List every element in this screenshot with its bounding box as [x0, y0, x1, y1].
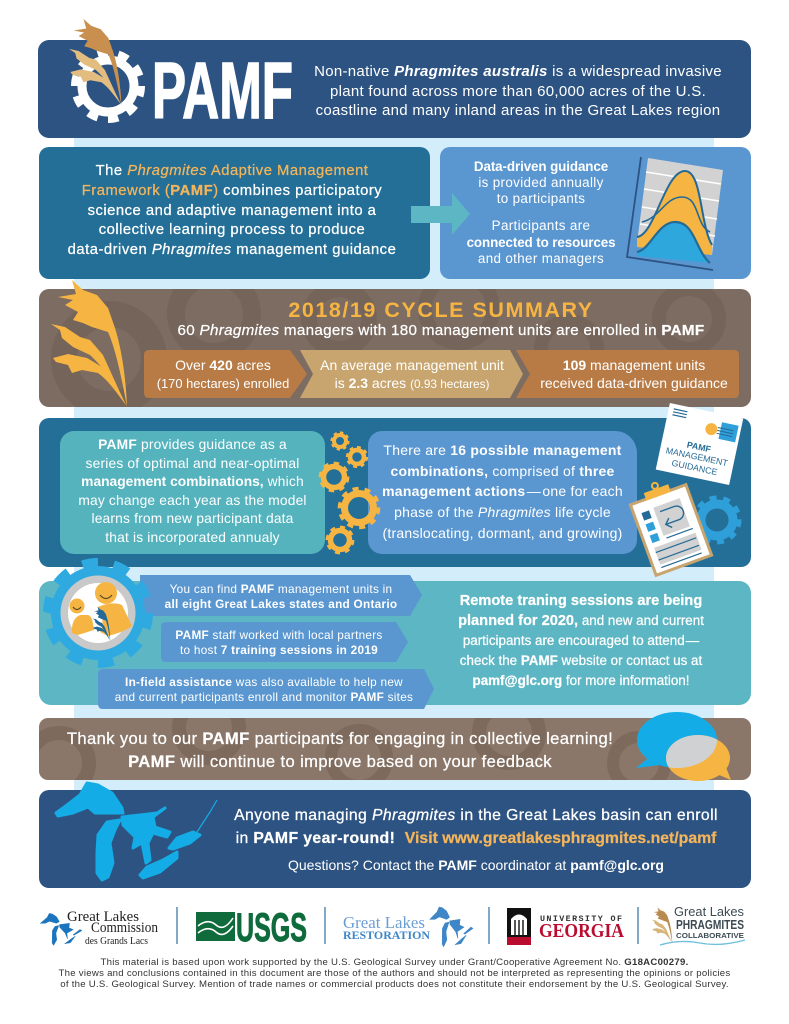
resources text: and other managers: [478, 251, 604, 266]
stat: acres enrolled: (170 hectares) enrolled: [157, 376, 289, 391]
logo: USGS: USGS: [236, 906, 307, 950]
fact arrows: [98, 575, 434, 709]
stat: units guided: [540, 357, 728, 391]
letter text: MANAGEMENT: [665, 446, 729, 469]
logo: Great Lakes Phragmites Collaborative: PHRAGMITES: [676, 917, 744, 932]
icon: PAMF logo: PAMF: [152, 46, 293, 135]
contact text: Questions? Contact the PAMF coordinator at pamf@glc.org: [288, 857, 664, 873]
16 combinations text: (translocating, dormant, and growing): [382, 525, 623, 541]
icon: blue gear: [697, 496, 742, 544]
fact: states: all eight Great Lakes states and Ontario: [165, 597, 397, 611]
header text: plant found across more than 60,000 acres of the U.S.: [330, 83, 706, 100]
letter text: PAMF: [686, 440, 712, 454]
icon: PAMF logo: [69, 19, 293, 135]
fact: in-field assistance: [115, 675, 413, 704]
arrow: [411, 193, 470, 235]
16 combinations text: There are 16 possible management: [383, 442, 622, 458]
funding disclaimer: This material is based upon work supported by the U.S. Geological Survey under Grant/Cooperative Agreement No. G18AC00279.: [100, 957, 689, 968]
stat: average unit: [320, 357, 504, 391]
panel: header: [38, 40, 751, 138]
stat: units guided: received data-driven guidance: [540, 375, 728, 391]
fact: training sessions: PAMF staff worked with local partners: [175, 628, 383, 642]
logo: Great Lakes Commission: Commission: [91, 920, 158, 936]
PAMF description text: science and adaptive management into a: [88, 203, 376, 219]
callout: guidance combinations: [60, 431, 325, 554]
logo: Great Lakes Restoration: Great Lakes: [343, 913, 425, 932]
heading: cycle summary: 2018/19 CYCLE SUMMARY: [288, 298, 594, 322]
thank you text: PAMF will continue to improve based on your feedback: [128, 752, 552, 771]
logo: Great Lakes Phragmites Collaborative: Great Lakes: [674, 904, 744, 919]
panel: what PAMF is: [39, 147, 430, 279]
logo: Great Lakes Commission: des Grands Lacs: [85, 936, 148, 947]
enroll text: [234, 807, 718, 847]
background stripe: [74, 130, 714, 805]
icon: clipboard: [629, 483, 713, 577]
stat: units guided: 109 management units: [563, 357, 705, 373]
funding disclaimer: of the U.S. Geological Survey. Mention of trade names or commercial products does not constitute their endorsement by the U.S. Geological Survey.: [60, 979, 729, 990]
guidance text: is provided annually: [478, 175, 604, 190]
background gears: [39, 718, 670, 780]
thank you text: [67, 729, 613, 771]
stat: average unit: is 2.3 acres (0.93 hectares): [335, 375, 489, 391]
PAMF description text: [68, 163, 396, 258]
panel: management combinations: [39, 418, 751, 567]
training callout text: Remote traning sessions are being: [460, 593, 702, 609]
guidance text: [474, 159, 608, 206]
PAMF description text: The Phragmites Adaptive Management: [96, 163, 368, 179]
combinations text: learns from new participant data: [91, 511, 294, 526]
guidance text: Data-driven guidance: [474, 159, 608, 174]
combinations text: management combinations, which: [81, 474, 304, 489]
PAMF description text: data-driven Phragmites management guidance: [68, 242, 396, 258]
header text: coastline and many inland areas in the Great Lakes region: [316, 102, 720, 119]
panel: cycle summary: [39, 289, 751, 407]
resources text: [467, 218, 615, 266]
logo: Great Lakes Restoration: [343, 907, 473, 947]
icon: guidance letter: [656, 403, 743, 485]
PAMF description text: Framework (PAMF) combines participatory: [82, 183, 382, 199]
training callout text: [458, 593, 704, 688]
background gears: [54, 290, 726, 404]
stat: acres enrolled: Over 420 acres: [175, 357, 271, 373]
logo: University of Georgia: UNIVERSITY OF: [540, 914, 622, 924]
letter text: [665, 440, 729, 477]
logo: Great Lakes Phragmites Collaborative: [652, 904, 745, 945]
logo: USGS: [196, 906, 307, 950]
enroll text: Anyone managing Phragmites in the Great Lakes basin can enroll: [234, 807, 718, 824]
16 combinations text: phase of the Phragmites life cycle: [394, 504, 611, 520]
stat chevrons: [144, 350, 739, 398]
combinations text: PAMF provides guidance as a: [98, 437, 287, 452]
panel: participation: [39, 581, 751, 705]
letter lines: [672, 408, 739, 442]
fact: states: You can find PAMF management units in: [170, 582, 392, 596]
training callout text: check the PAMF website or contact us at: [460, 653, 702, 668]
16 combinations text: combinations, comprised of three: [390, 463, 615, 479]
icon: gold gears: [318, 431, 380, 554]
panel: guidance: [440, 147, 751, 279]
letter text: GUIDANCE: [671, 458, 718, 477]
header text: [314, 63, 722, 119]
logo: Great Lakes Restoration: RESTORATION: [343, 928, 430, 942]
icon: chart: [626, 156, 723, 271]
logo: University of Georgia: [507, 908, 624, 945]
enroll text: in PAMF year-round! Visit www.greatlakesphragmites.net/pamf: [236, 830, 716, 847]
callout: 16 combinations: [368, 431, 637, 554]
logo: Great Lakes Phragmites Collaborative: COLLABORATIVE: [676, 933, 744, 940]
stat: average unit: An average management unit: [320, 357, 504, 373]
header text: Non-native Phragmites australis is a widespread invasive: [314, 63, 722, 80]
fact: in-field assistance: and current participants enroll and monitor PAMF sites: [115, 690, 413, 704]
cycle summary subheading: 60 Phragmites managers with 180 management units are enrolled in PAMF: [178, 322, 704, 339]
icon: participants gear: [43, 558, 153, 668]
panel: thank you: [39, 718, 751, 780]
icon: speech bubbles: [636, 712, 731, 781]
resources text: Participants are: [492, 218, 590, 233]
16 combinations text: management actions — one for each: [382, 483, 623, 499]
combinations text: may change each year as the model: [78, 493, 307, 508]
combinations text: that is incorporated annualy: [105, 530, 280, 545]
training callout text: participants are encouraged to attend —: [463, 633, 699, 648]
PAMF description text: collective learning process to produce: [99, 222, 365, 238]
thank you text: Thank you to our PAMF participants for engaging in collective learning!: [67, 729, 613, 748]
panel: enroll: [39, 790, 751, 888]
icon: golden phragmites: [51, 280, 127, 407]
logo: Great Lakes Commission: Great Lakes: [67, 909, 139, 925]
logo: Great Lakes Commission: [40, 909, 158, 947]
fact: states: [165, 582, 397, 611]
guidance text: to participants: [497, 191, 585, 206]
combinations text: series of optimal and near-optimal: [86, 456, 299, 471]
training callout text: pamf@glc.org for more information!: [473, 673, 689, 688]
training callout text: planned for 2020, and new and current: [458, 613, 704, 629]
fact: training sessions: [175, 628, 383, 657]
fact: in-field assistance: In-field assistance was also available to help new: [125, 675, 403, 689]
fact: training sessions: to host 7 training sessions in 2019: [180, 643, 378, 657]
combinations text: [78, 437, 307, 545]
resources text: connected to resources: [467, 235, 615, 250]
logo: University of Georgia: GEORGIA: [539, 920, 624, 942]
stat: acres enrolled: [157, 357, 289, 391]
funding disclaimer: The views and conclusions contained in this document are those of the authors and should not be interpreted as representing the opinions or policies: [59, 968, 730, 979]
16 combinations text: [382, 442, 623, 541]
funding disclaimer: [58, 957, 730, 990]
